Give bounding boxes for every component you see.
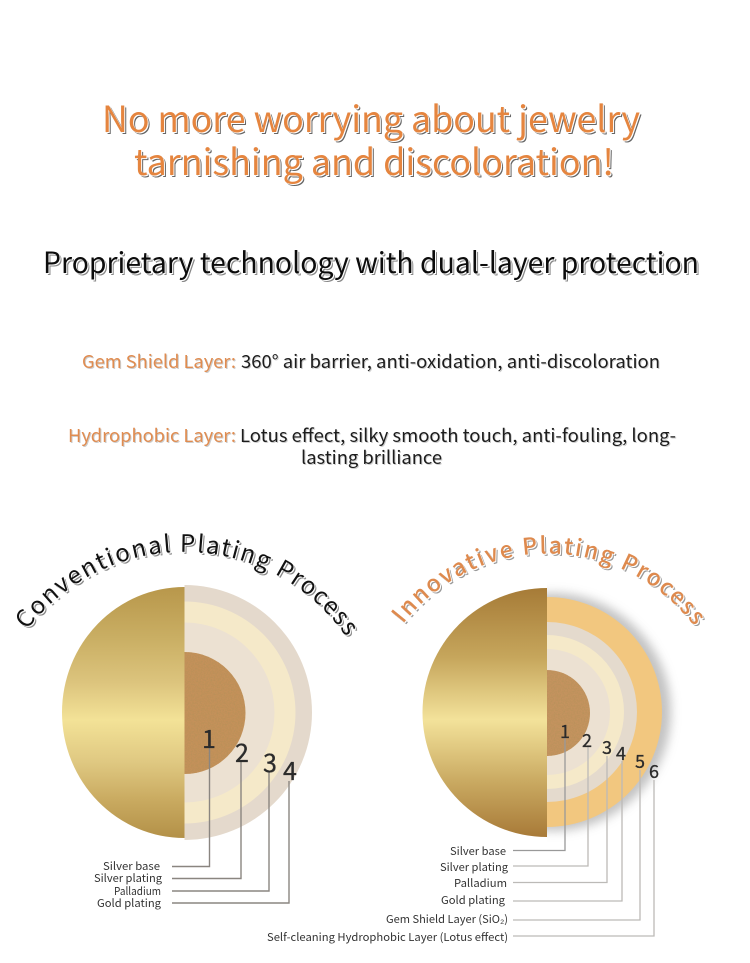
- diagram: innovative plating cross-section: [267, 588, 671, 945]
- text block: hydrophobic layer: lasting brilliance: [301, 444, 442, 470]
- title: No more worrying about jewelry: [102, 91, 640, 143]
- layer numbers: [202, 720, 297, 788]
- layer numbers: 4: [283, 752, 297, 788]
- layer numbers: [560, 718, 659, 784]
- layer numbers: 4: [616, 740, 626, 766]
- layer labels: Gem Shield Layer (SiO₂): [386, 911, 508, 927]
- subtitle: Proprietary technology with dual-layer protection: [43, 240, 699, 282]
- layer labels: [267, 843, 509, 945]
- text block: gem shield layer: 360° air barrier, anti-oxidation, anti-discoloration: [241, 348, 660, 374]
- silver base core: [547, 670, 590, 756]
- layer numbers: 6: [649, 758, 659, 784]
- layer labels: Palladium: [114, 883, 161, 899]
- layer numbers: 3: [602, 734, 612, 760]
- layer labels: Silver plating: [94, 870, 163, 886]
- text block: hydrophobic layer: Lotus effect, silky smooth touch, anti-fouling, long-: [240, 422, 676, 448]
- layer labels: Silver plating: [440, 859, 509, 875]
- leader lines: [513, 738, 654, 936]
- layer labels: Self-cleaning Hydrophobic Layer (Lotus effect): [267, 929, 508, 945]
- soft shadow: [547, 588, 676, 836]
- gold half: [62, 587, 185, 838]
- diagram: conventional plating cross-section: [57, 585, 312, 911]
- layer labels: Gold plating: [441, 892, 506, 908]
- layer numbers: 3: [263, 744, 277, 780]
- layer labels: [94, 858, 163, 911]
- silver base core: [184, 652, 245, 774]
- heading: conventional plating process: Conventional Plating Process: [16, 533, 358, 637]
- layer numbers: 5: [635, 748, 645, 774]
- layer rings: [547, 597, 662, 827]
- layer numbers: 1: [560, 718, 570, 744]
- layer numbers: 2: [582, 727, 592, 753]
- layer labels: Silver base: [450, 843, 506, 859]
- layer numbers: 1: [202, 720, 216, 756]
- text block: hydrophobic layer: Hydrophobic Layer:: [68, 422, 236, 448]
- layer numbers: 2: [235, 734, 249, 770]
- heading: innovative plating process: Innovative Plating Process: [391, 535, 705, 626]
- title: tarnishing and discoloration!: [134, 134, 614, 186]
- layer rings: [184, 585, 312, 840]
- title: [102, 91, 640, 186]
- layer labels: Silver base: [103, 858, 160, 874]
- gold half: [422, 588, 547, 837]
- layer labels: Gold plating: [97, 895, 162, 911]
- leader lines: [172, 748, 289, 903]
- text block: gem shield layer: Gem Shield Layer:: [82, 348, 236, 374]
- text block: hydrophobic layer: [68, 422, 676, 470]
- layer labels: Palladium: [454, 875, 507, 891]
